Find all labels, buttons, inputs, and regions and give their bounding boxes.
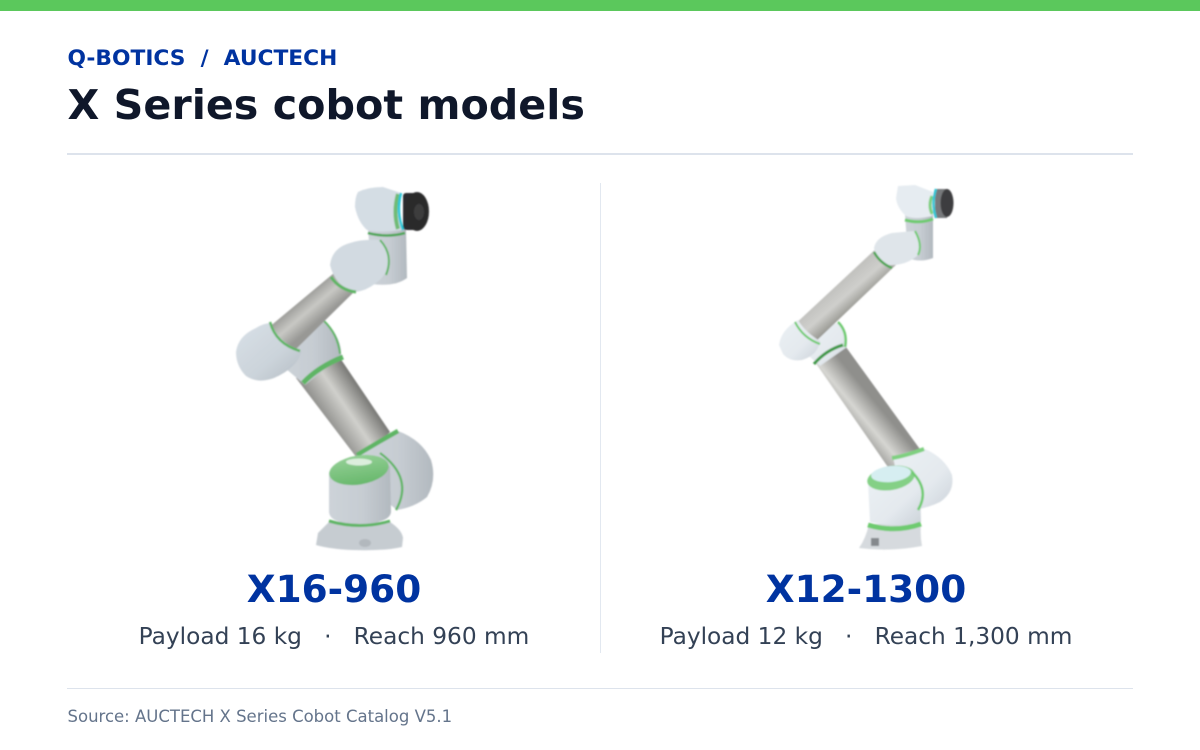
upper arm tube bbox=[268, 268, 358, 352]
lower arm tube bbox=[296, 352, 390, 462]
base cap bbox=[865, 462, 917, 494]
foot bbox=[316, 522, 403, 550]
foot bbox=[859, 524, 922, 550]
eyebrow: brand line: Q-BOTICS / AUCTECH bbox=[68, 46, 337, 71]
source note: Source: AUCTECH X Series Cobot Catalog V5.1 bbox=[68, 707, 452, 726]
elbow cap bbox=[779, 320, 820, 360]
forearm joint bbox=[874, 231, 919, 265]
wrist head bbox=[896, 185, 933, 218]
specs: X16-960: Payload 16 kg · Reach 960 mm bbox=[139, 623, 529, 650]
model name: X16-960: X16-960 bbox=[247, 567, 421, 611]
robot arm: X16-960 bbox=[236, 187, 433, 550]
flange bbox=[403, 193, 417, 230]
lower arm tube bbox=[808, 336, 922, 470]
forearm joint bbox=[330, 240, 389, 292]
wrist head bbox=[355, 187, 402, 232]
elbow cap bbox=[236, 323, 302, 381]
robot arm: X12-1300 bbox=[779, 185, 954, 550]
base green cap bbox=[327, 451, 391, 489]
elbow second body bbox=[280, 322, 341, 385]
title: X Series cobot models bbox=[68, 81, 585, 129]
elbow second body bbox=[808, 323, 847, 366]
flange bbox=[935, 189, 947, 218]
wrist vertical bbox=[368, 228, 407, 285]
shoulder joint bbox=[357, 431, 433, 510]
base cylinder bbox=[868, 476, 921, 525]
model name: X12-1300: X12-1300 bbox=[766, 567, 966, 611]
shoulder joint bbox=[893, 449, 952, 510]
upper arm tube bbox=[792, 245, 899, 345]
base cylinder bbox=[329, 466, 391, 524]
specs: X12-1300: Payload 12 kg · Reach 1,300 mm bbox=[660, 623, 1072, 650]
wrist vertical bbox=[905, 214, 933, 260]
